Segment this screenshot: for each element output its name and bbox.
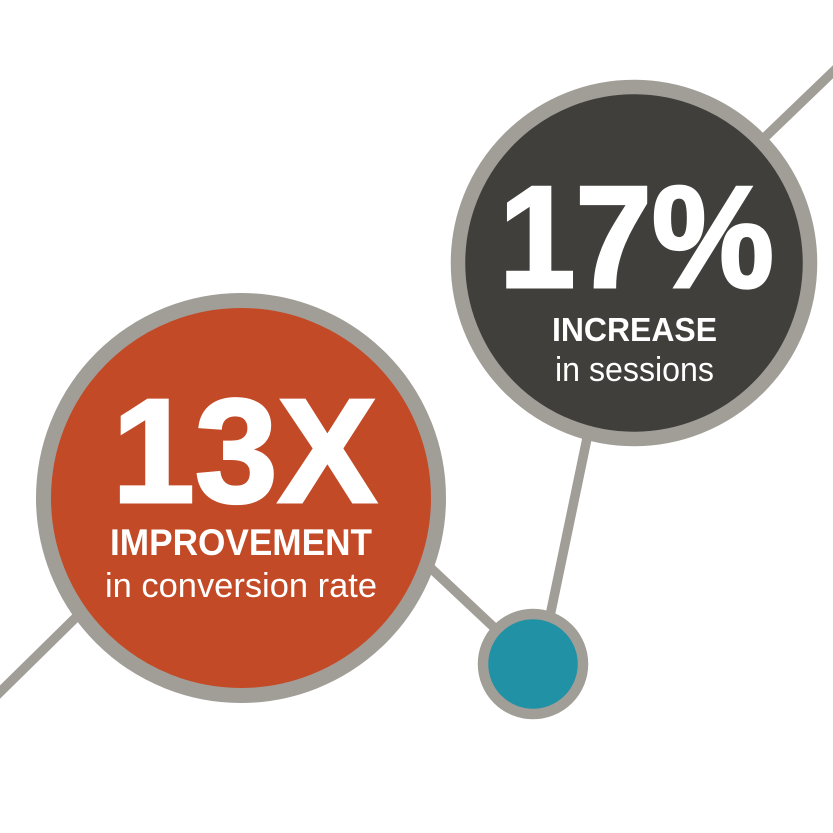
label: INCREASE: INCREASE: [552, 311, 717, 348]
trend line connecting the circles: [0, 68, 833, 696]
big number: 17%: 17%: [499, 156, 774, 318]
label: in sessions: in sessions: [555, 351, 714, 389]
label: IMPROVEMENT: IMPROVEMENT: [110, 522, 372, 563]
teal node circle: [483, 614, 583, 714]
label: in conversion rate: in conversion rate: [105, 567, 377, 605]
circle: 17% increase in sessions: [458, 87, 810, 439]
circle: 13X improvement in conversion rate: [44, 300, 438, 696]
big number: 13X: 13X: [112, 369, 377, 534]
